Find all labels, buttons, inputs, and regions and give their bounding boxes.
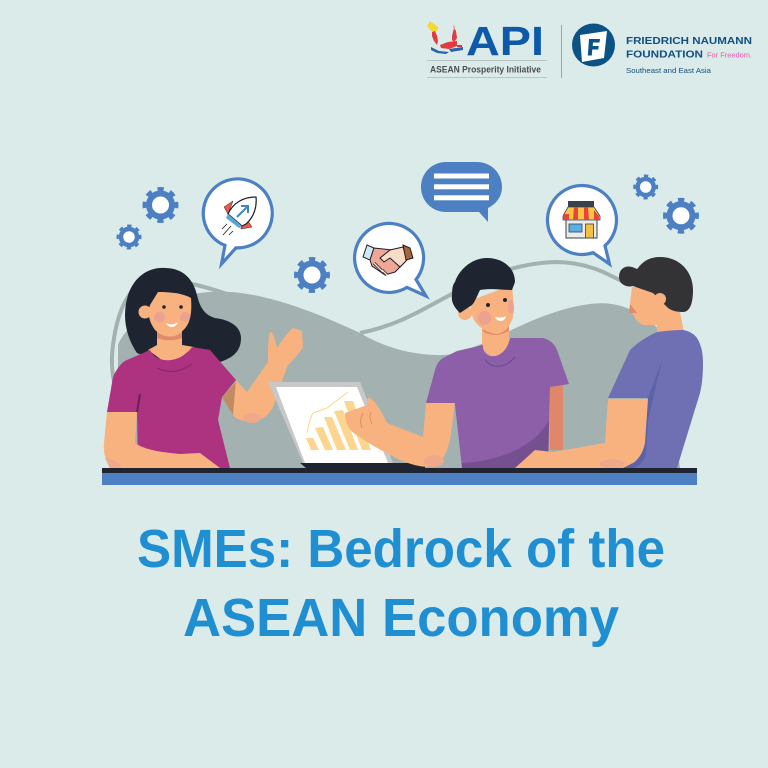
logo: ASEAN Prosperity Initiative [427, 18, 547, 78]
raised arm and hand [233, 328, 303, 422]
ear [458, 306, 472, 320]
back arm [550, 385, 563, 450]
icon: rocket [222, 197, 256, 235]
text: region: Southeast and East Asia [626, 66, 712, 75]
shirt [426, 338, 569, 468]
shirt [608, 330, 703, 468]
person: woman [104, 268, 303, 468]
arm [515, 399, 648, 468]
icon: gear 4 [633, 175, 658, 199]
speech bubble: handshake [355, 223, 426, 296]
laptop with chart [268, 382, 425, 468]
ear [654, 293, 666, 305]
icon: gear 5 [663, 198, 699, 234]
title: ASEAN Economy [183, 589, 619, 648]
icon: handshake [363, 245, 413, 275]
hair [125, 268, 241, 370]
logo: Friedrich Naumann Foundation: FOUNDATION [626, 48, 703, 60]
hair [619, 257, 693, 312]
trend line [307, 392, 348, 433]
inner arm shadow [222, 382, 248, 415]
hair [452, 258, 515, 313]
speech bubble: shop [547, 186, 616, 264]
elbow [243, 413, 261, 423]
text: foundation name: FRIEDRICH NAUMANN [626, 35, 752, 47]
lower arm [104, 412, 220, 468]
text: slogan: For Freedom. [707, 50, 752, 60]
speech bubble: chat [421, 162, 502, 222]
logo: Friedrich Naumann Foundation [572, 24, 752, 75]
ear [138, 306, 152, 318]
speech bubble: rocket [203, 179, 272, 264]
person: man in purple [345, 258, 569, 468]
tagline: ASEAN Prosperity Initiative: ASEAN Prosperity Initiative [430, 64, 541, 74]
shirt [107, 347, 236, 468]
face [149, 292, 191, 336]
wordmark: API: API [466, 18, 544, 64]
icon: gear 1 [142, 187, 179, 223]
title [137, 520, 665, 648]
icon: FNF circle [572, 24, 615, 66]
icon: ASEAN map [427, 21, 463, 54]
bar chart [306, 401, 371, 450]
neck and face [630, 285, 684, 332]
table [102, 468, 697, 485]
background: grey hills [112, 262, 680, 468]
icon: shop [563, 201, 600, 238]
neck [480, 322, 515, 362]
title: SMEs: Bedrock of the [137, 520, 665, 579]
icon: gear 3 [294, 257, 330, 293]
neck [148, 325, 194, 366]
icon: gear 2 [117, 225, 141, 249]
person: man in blue [515, 257, 703, 469]
pointing arm [345, 397, 455, 467]
face [471, 285, 514, 334]
